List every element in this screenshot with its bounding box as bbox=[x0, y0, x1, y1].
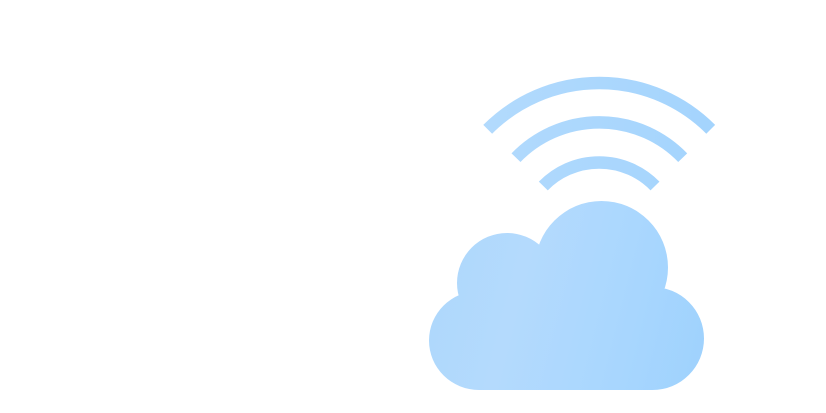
outer wifi arc bbox=[488, 83, 711, 129]
icon: cloud bbox=[429, 201, 704, 390]
middle wifi arc bbox=[516, 122, 683, 158]
inner wifi arc bbox=[543, 162, 655, 186]
icon: wifi signal arcs bbox=[488, 83, 711, 186]
